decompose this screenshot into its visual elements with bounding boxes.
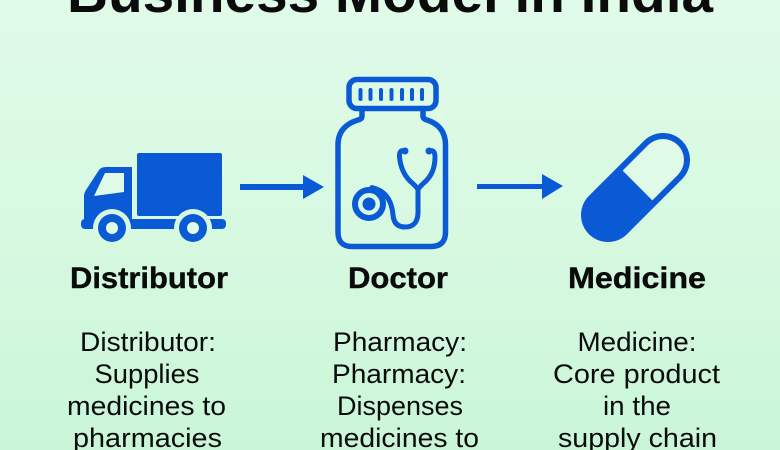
text: medicine description: Medicine: <box>578 327 696 357</box>
arrow: doctor to medicine <box>477 174 563 199</box>
text: pharmacy description: Pharmacy: <box>333 327 467 357</box>
text: medicine description: Core product <box>553 359 721 389</box>
text: distributor description: medicines to <box>67 391 226 421</box>
icon: capsule <box>608 139 684 215</box>
text: distributor description <box>67 327 226 450</box>
label: Doctor: Doctor <box>348 262 448 295</box>
label: Medicine: Medicine <box>568 262 706 295</box>
icon: bottle with stethoscope <box>338 80 446 246</box>
text: pharmacy description <box>320 327 479 450</box>
arrow: distributor to doctor <box>240 175 324 199</box>
icon: delivery truck <box>81 153 226 247</box>
text: distributor description: Distributor: <box>80 327 216 357</box>
text: pharmacy description: Dispenses <box>337 391 463 421</box>
text: pharmacy description: Pharmacy: <box>332 359 466 389</box>
text: distributor description: Supplies <box>94 359 200 389</box>
text: medicine description: in the <box>603 391 671 421</box>
label: Distributor: Distributor <box>70 262 228 295</box>
text: medicine description <box>553 327 721 450</box>
